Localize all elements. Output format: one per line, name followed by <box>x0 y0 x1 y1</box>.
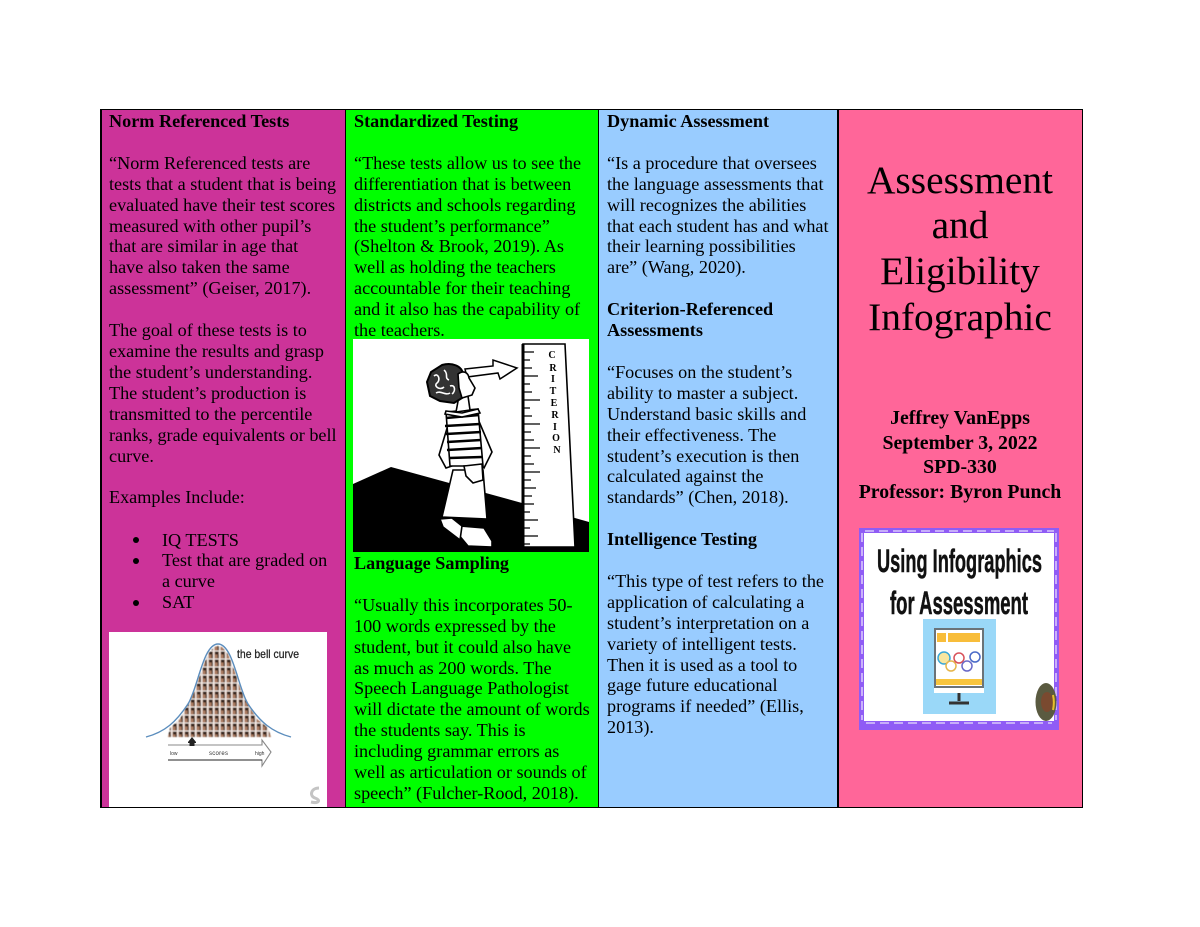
text: norm referenced tests: tests that a student that is being <box>109 174 336 194</box>
text: norm referenced tests: measured with other pupil’s <box>109 216 311 236</box>
text: dynamic, criterion and intelligence: are” (Wang, 2020). <box>607 257 746 277</box>
text: dynamic, criterion and intelligence: calculated against the <box>607 466 763 486</box>
text: norm referenced tests: “Norm Referenced tests are <box>109 153 310 173</box>
text: language sampling: including grammar errors as <box>354 741 559 761</box>
text: norm referenced tests <box>109 111 337 507</box>
text: language sampling: will dictate the amount of words <box>354 699 590 719</box>
text: norm referenced tests: assessment” (Geiser, 2017). <box>109 278 311 298</box>
author details: Jeffrey VanEpps <box>890 407 1030 429</box>
text: norm referenced tests: transmitted to the percentile <box>109 404 312 424</box>
text: standardized testing <box>354 111 581 340</box>
ruler letters: O <box>552 433 560 444</box>
arrow <box>465 360 517 379</box>
text: dynamic, criterion and intelligence: standards” (Chen, 2018). <box>607 487 789 507</box>
text: dynamic, criterion and intelligence: Intelligence Testing <box>607 529 757 549</box>
author details: SPD-330 <box>923 456 997 478</box>
image heading <box>877 543 1042 621</box>
title: Eligibility <box>880 249 1040 293</box>
text: language sampling: as much as 200 words. The <box>354 658 552 678</box>
label: the bell curve <box>237 647 299 661</box>
text: dynamic, criterion and intelligence: 2013). <box>607 717 654 737</box>
text: dynamic, criterion and intelligence: their effectiveness. The <box>607 425 776 445</box>
text: norm referenced tests: curve. <box>109 446 154 466</box>
ruler letters: E <box>551 398 558 409</box>
table frame <box>100 109 1083 808</box>
text: dynamic, criterion and intelligence: “This type of test refers to the <box>607 571 824 591</box>
list: examples: Test that are graded on <box>162 550 327 570</box>
text: standardized testing: (Shelton & Brook, 2019). As <box>354 236 564 256</box>
ruler letters: T <box>550 386 557 397</box>
ruler <box>523 344 575 547</box>
image: bell curve: scores <box>209 751 228 757</box>
text: dynamic, criterion and intelligence: that each student has and what <box>607 216 829 236</box>
text: language sampling <box>354 553 590 803</box>
text: norm referenced tests: the student’s understanding. <box>109 362 312 382</box>
text: dynamic, criterion and intelligence: Understand basic skills and <box>607 404 806 424</box>
text: language sampling: “Usually this incorporates 50- <box>354 595 573 615</box>
text: dynamic, criterion and intelligence: “Focuses on the student’s <box>607 362 792 382</box>
text: norm referenced tests: Examples Include: <box>109 487 245 507</box>
text: dynamic, criterion and intelligence: Assessments <box>607 320 703 340</box>
text: dynamic, criterion and intelligence: Then it is used as a tool to <box>607 655 797 675</box>
text: norm referenced tests: examine the results and grasp <box>109 341 324 361</box>
ruler letters: C <box>548 350 556 361</box>
image: bell curve: high <box>255 751 265 757</box>
ruler letters: I <box>551 374 555 385</box>
ruler letters: I <box>553 422 557 433</box>
text: standardized testing: accountable for their teaching <box>354 278 570 298</box>
panel: title <box>839 110 1082 807</box>
text: dynamic, criterion and intelligence: Criterion-Referenced <box>607 299 773 319</box>
list: examples: IQ TESTS <box>162 530 239 550</box>
text: standardized testing: differentiation that is between <box>354 174 571 194</box>
small up arrow <box>188 737 196 746</box>
text: dynamic, criterion and intelligence: their learning possibilities <box>607 236 796 256</box>
face <box>458 372 475 398</box>
text: norm referenced tests: The goal of these tests is to <box>109 320 307 340</box>
watermark <box>311 788 319 803</box>
text: standardized testing: the student’s performance” <box>354 216 550 236</box>
text: dynamic, criterion and intelligence: ability to master a subject. <box>607 383 798 403</box>
text: standardized testing: Standardized Testing <box>354 111 518 131</box>
panel: dynamic assessment <box>599 110 837 807</box>
text: norm referenced tests: evaluated have their test scores <box>109 195 335 215</box>
text: language sampling: 100 words expressed by the <box>354 616 556 636</box>
panel: standardized testing <box>346 110 598 807</box>
text: language sampling: student, but it could also have <box>354 637 571 657</box>
text: dynamic, criterion and intelligence: will recognizes the abilities <box>607 195 806 215</box>
text: language sampling: speech” (Fulcher-Rood, 2018). <box>354 783 579 803</box>
text: norm referenced tests: have also taken the same <box>109 257 290 277</box>
text: dynamic, criterion and intelligence: gage future educational <box>607 675 778 695</box>
image: using infographics for assessment <box>859 528 1059 730</box>
text: standardized testing: the teachers. <box>354 320 445 340</box>
text: language sampling: Language Sampling <box>354 553 509 573</box>
author details: September 3, 2022 <box>882 432 1038 454</box>
text: dynamic, criterion and intelligence <box>607 111 829 737</box>
text: standardized testing: well as holding the teachers <box>354 257 556 277</box>
ruler letters: R <box>549 363 557 374</box>
scores arrow <box>168 740 271 766</box>
text: norm referenced tests: ranks, grade equivalents or bell <box>109 425 337 445</box>
hill <box>353 467 589 552</box>
panel: norm referenced tests <box>102 110 345 807</box>
list: examples <box>133 530 327 612</box>
text: standardized testing: “These tests allow us to see the <box>354 153 581 173</box>
text: language sampling: Speech Language Pathologist <box>354 678 569 698</box>
person <box>427 364 492 547</box>
ruler letters: N <box>553 445 561 456</box>
text: norm referenced tests: Norm Referenced Tests <box>109 111 289 131</box>
title <box>867 158 1053 339</box>
text: dynamic, criterion and intelligence: programs if needed” (Ellis, <box>607 696 804 716</box>
title: and <box>932 203 988 247</box>
text: dynamic, criterion and intelligence: student’s interpretation on a <box>607 613 809 633</box>
ruler letters: R <box>551 410 559 421</box>
image: bell curve: low <box>170 751 178 757</box>
text: dynamic, criterion and intelligence: the language assessments that <box>607 174 824 194</box>
bell curve people <box>168 646 271 737</box>
text: norm referenced tests: The student’s production is <box>109 383 306 403</box>
list: examples: SAT <box>162 592 194 612</box>
text: dynamic, criterion and intelligence: student’s execution is then <box>607 446 799 466</box>
author details <box>859 407 1061 503</box>
title: Assessment <box>867 158 1053 202</box>
text: standardized testing: and it also has the capability of <box>354 299 580 319</box>
text: language sampling: the students say. This is <box>354 720 526 740</box>
title: Infographic <box>868 295 1052 339</box>
text: dynamic, criterion and intelligence: Dynamic Assessment <box>607 111 769 131</box>
text: norm referenced tests: that are similar in age that <box>109 236 298 256</box>
list: examples: a curve <box>162 571 215 591</box>
author details: Professor: Byron Punch <box>859 481 1061 503</box>
image: criterion ruler <box>353 339 589 552</box>
avatar badge <box>1036 683 1056 721</box>
text: dynamic, criterion and intelligence: application of calculating a <box>607 592 804 612</box>
hair <box>427 364 463 403</box>
text: standardized testing: districts and schools regarding <box>354 195 576 215</box>
text: dynamic, criterion and intelligence: variety of intelligent tests. <box>607 634 797 654</box>
text: dynamic, criterion and intelligence: “Is a procedure that oversees <box>607 153 817 173</box>
image: bell curve <box>109 632 327 807</box>
text: language sampling: well as articulation or sounds of <box>354 762 587 782</box>
monitor icon <box>923 619 996 714</box>
curve line <box>146 644 291 737</box>
